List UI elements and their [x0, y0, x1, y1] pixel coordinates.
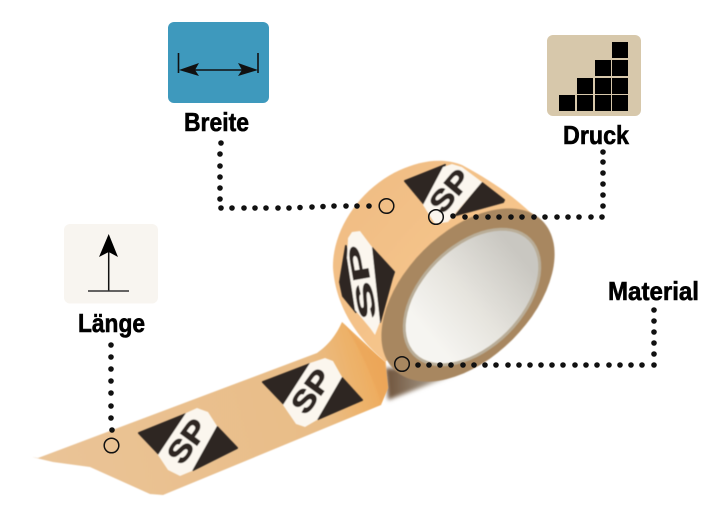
- leader: Druck: [429, 149, 606, 224]
- icon: width (Breite): [168, 22, 269, 103]
- logo label: side of roll: [340, 231, 394, 335]
- icon: print (Druck): [547, 35, 641, 116]
- leader: Breite: [217, 140, 394, 213]
- tape strip: [32, 322, 388, 495]
- logo label: strip left: SP: [160, 413, 215, 470]
- core hole: [381, 206, 563, 388]
- tape roll photo: [32, 161, 587, 495]
- logo label: strip right: [263, 358, 362, 427]
- logo label: top of roll: [405, 163, 504, 224]
- logo label: strip left: [139, 408, 237, 476]
- fold between roll and strip: [343, 322, 388, 403]
- logo label: top of roll: SP: [423, 163, 477, 219]
- leader: Material: [395, 307, 657, 371]
- icon: length (Länge): [64, 224, 158, 304]
- roll shadow: [385, 368, 472, 400]
- logo label: strip right: SP: [284, 363, 339, 420]
- core rim: [377, 202, 567, 392]
- leader: Länge: [104, 342, 119, 453]
- roll body: [333, 161, 532, 362]
- heading: Druck: Druck: [563, 120, 629, 150]
- logo label: side of roll: SP: [343, 243, 382, 321]
- heading: Länge: Länge: [78, 308, 145, 338]
- roll end face: [349, 176, 587, 414]
- heading: Breite: Breite: [184, 107, 249, 137]
- heading: Material: Material: [608, 276, 699, 306]
